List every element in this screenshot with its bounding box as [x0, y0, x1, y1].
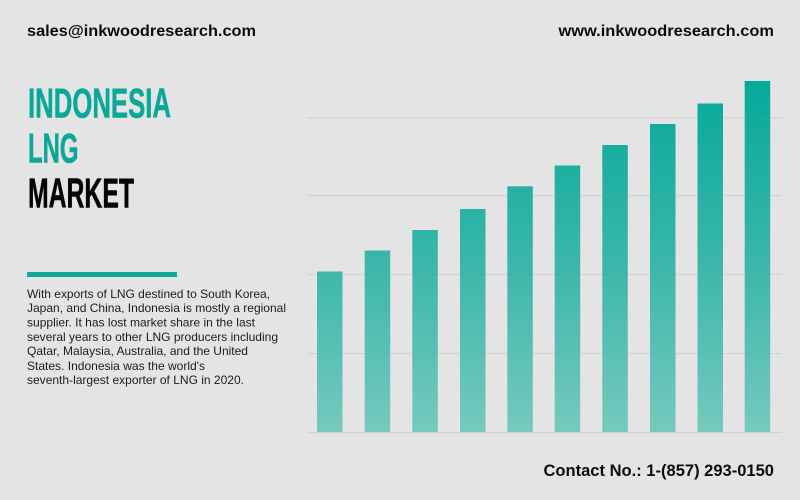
- description text block: States. Indonesia was the world's: [27, 359, 205, 373]
- contact number: Contact No.: 1-(857) 293-0150: [544, 462, 774, 480]
- email address: sales@inkwoodresearch.com: [27, 23, 256, 40]
- description text block: several years to other LNG producers including: [27, 330, 278, 344]
- description text block: seventh-largest exporter of LNG in 2020.: [27, 373, 244, 387]
- description text block: [27, 287, 286, 387]
- title line: Market: MARKET: [28, 170, 134, 216]
- description text block: With exports of LNG destined to South Korea,: [27, 287, 270, 301]
- title line: Indonesia: INDONESIA: [28, 80, 171, 126]
- description text block: Qatar, Malaysia, Australia, and the United: [27, 344, 248, 358]
- description text block: Japan, and China, Indonesia is mostly a regional: [27, 301, 286, 315]
- description text block: supplier. It has lost market share in the last: [27, 316, 256, 330]
- title: [28, 80, 171, 216]
- bar chart: [307, 81, 782, 432]
- title line: LNG: LNG: [28, 124, 78, 172]
- accent rule: [27, 272, 177, 277]
- website address: www.inkwoodresearch.com: [557, 23, 774, 40]
